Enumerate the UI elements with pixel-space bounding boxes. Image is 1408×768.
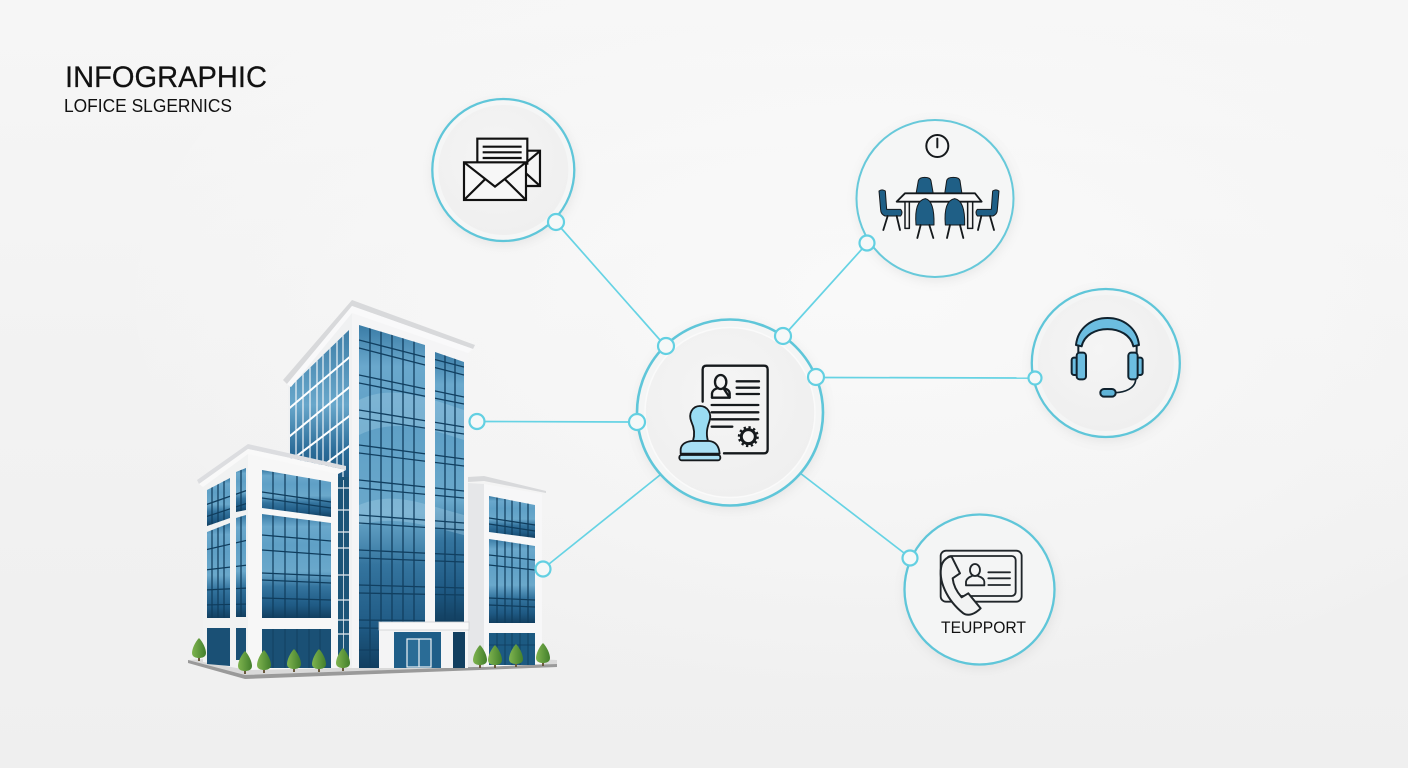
icon: envelopes (464, 139, 540, 200)
connector lines (484, 228, 1029, 564)
entrance canopy and doors (379, 622, 469, 668)
ground base (188, 650, 557, 679)
icon: headset (1072, 318, 1143, 397)
label: TEUPPORT: TEUPPORT (941, 618, 1026, 637)
icon: document with stamp (679, 366, 768, 460)
right building (468, 476, 546, 667)
panel: headset (1032, 289, 1180, 437)
panel: mail (432, 99, 574, 241)
main tower (283, 300, 475, 670)
icon: clock and meeting table (879, 135, 999, 238)
panel: phone contact (904, 514, 1054, 664)
icon: phone and contact card (941, 551, 1022, 615)
subtitle: LOFICE SLGERNICS (64, 95, 232, 116)
left building (197, 444, 346, 670)
narrow glass strip (338, 477, 349, 665)
trees (192, 638, 550, 674)
building illustration (188, 300, 557, 679)
title: INFOGRAPHIC (65, 61, 267, 94)
connector nodes (470, 214, 1042, 576)
panel: central hub (637, 320, 823, 506)
panel: meeting room (856, 120, 1014, 277)
